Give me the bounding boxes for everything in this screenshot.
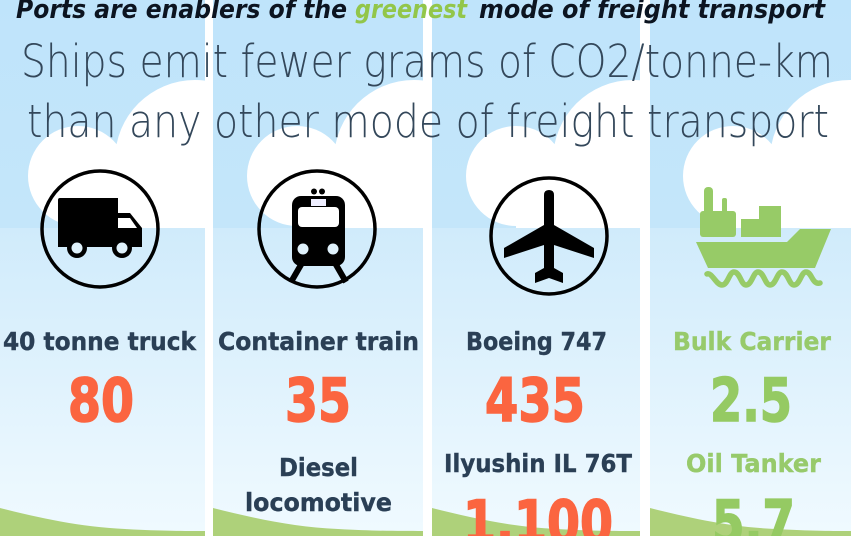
panel background: ship column: [650, 0, 851, 536]
panel background: truck column: [0, 0, 205, 536]
truck value: 80: [68, 366, 134, 436]
diesel locomotive label: [245, 453, 392, 517]
icon: ship: [696, 187, 831, 285]
oil tanker label: Oil Tanker: [686, 449, 822, 478]
ilyushin label: Ilyushin IL 76T: [444, 449, 632, 478]
bulk carrier label: Bulk Carrier: [673, 327, 832, 356]
train label: Container train: [218, 327, 419, 356]
train value: 35: [285, 366, 351, 436]
panel background: train column: [213, 0, 423, 536]
icon: truck: [42, 171, 158, 287]
main heading: [21, 35, 833, 148]
icon: train: [259, 171, 375, 287]
diesel locomotive label: locomotive: [245, 488, 392, 517]
boeing label: Boeing 747: [466, 327, 607, 356]
truck label: 40 tonne truck: [3, 327, 197, 356]
bulk carrier value: 2.5: [710, 366, 792, 436]
icon: plane: [491, 178, 607, 294]
top tagline: [16, 0, 826, 25]
boeing value: 435: [485, 366, 585, 436]
panel background: plane column: [432, 0, 640, 536]
diesel locomotive label: Diesel: [279, 453, 358, 482]
